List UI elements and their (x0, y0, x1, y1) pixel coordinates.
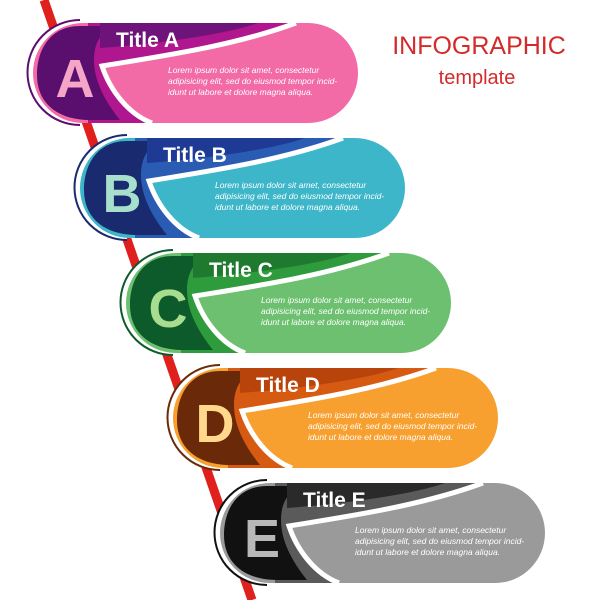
body text D: idunt ut labore et dolore magna aliqua. (308, 432, 453, 442)
body text E: idunt ut labore et dolore magna aliqua. (355, 547, 500, 557)
letter A: A (56, 49, 94, 109)
letter B: B (102, 164, 142, 224)
red diagonal line (44, 0, 252, 600)
body text A: adipisicing elit, sed do eiusmod tempor incid- (168, 76, 337, 86)
body text A: idunt ut labore et dolore magna aliqua. (168, 87, 313, 97)
body text D: Lorem ipsum dolor sit amet, consectetur (308, 410, 460, 420)
body text A: Lorem ipsum dolor sit amet, consectetur (168, 65, 320, 75)
panel: D (168, 365, 498, 470)
body text E: adipisicing elit, sed do eiusmod tempor incid- (355, 536, 524, 546)
panel: E (214, 480, 545, 585)
title text C: Title C (209, 259, 273, 282)
body text D: adipisicing elit, sed do eiusmod tempor incid- (308, 421, 477, 431)
letter D: D (196, 394, 234, 454)
body text C: Lorem ipsum dolor sit amet, consectetur (261, 295, 413, 305)
title (392, 32, 566, 89)
title text D: Title D (256, 374, 320, 397)
body text B: idunt ut labore et dolore magna aliqua. (215, 202, 360, 212)
body text B: adipisicing elit, sed do eiusmod tempor incid- (215, 191, 384, 201)
letter C: C (148, 279, 188, 339)
body text C: adipisicing elit, sed do eiusmod tempor incid- (261, 306, 430, 316)
title text B: Title B (163, 144, 227, 167)
title: template (439, 67, 515, 89)
panel: B (74, 135, 405, 240)
title text E: Title E (303, 489, 366, 512)
panel: C (120, 250, 451, 355)
panel: A (28, 20, 358, 125)
title: INFOGRAPHIC (392, 32, 566, 60)
title text A: Title A (116, 29, 179, 52)
letter E: E (244, 509, 280, 569)
body text C: idunt ut labore et dolore magna aliqua. (261, 317, 406, 327)
body text B: Lorem ipsum dolor sit amet, consectetur (215, 180, 367, 190)
body text E: Lorem ipsum dolor sit amet, consectetur (355, 525, 507, 535)
